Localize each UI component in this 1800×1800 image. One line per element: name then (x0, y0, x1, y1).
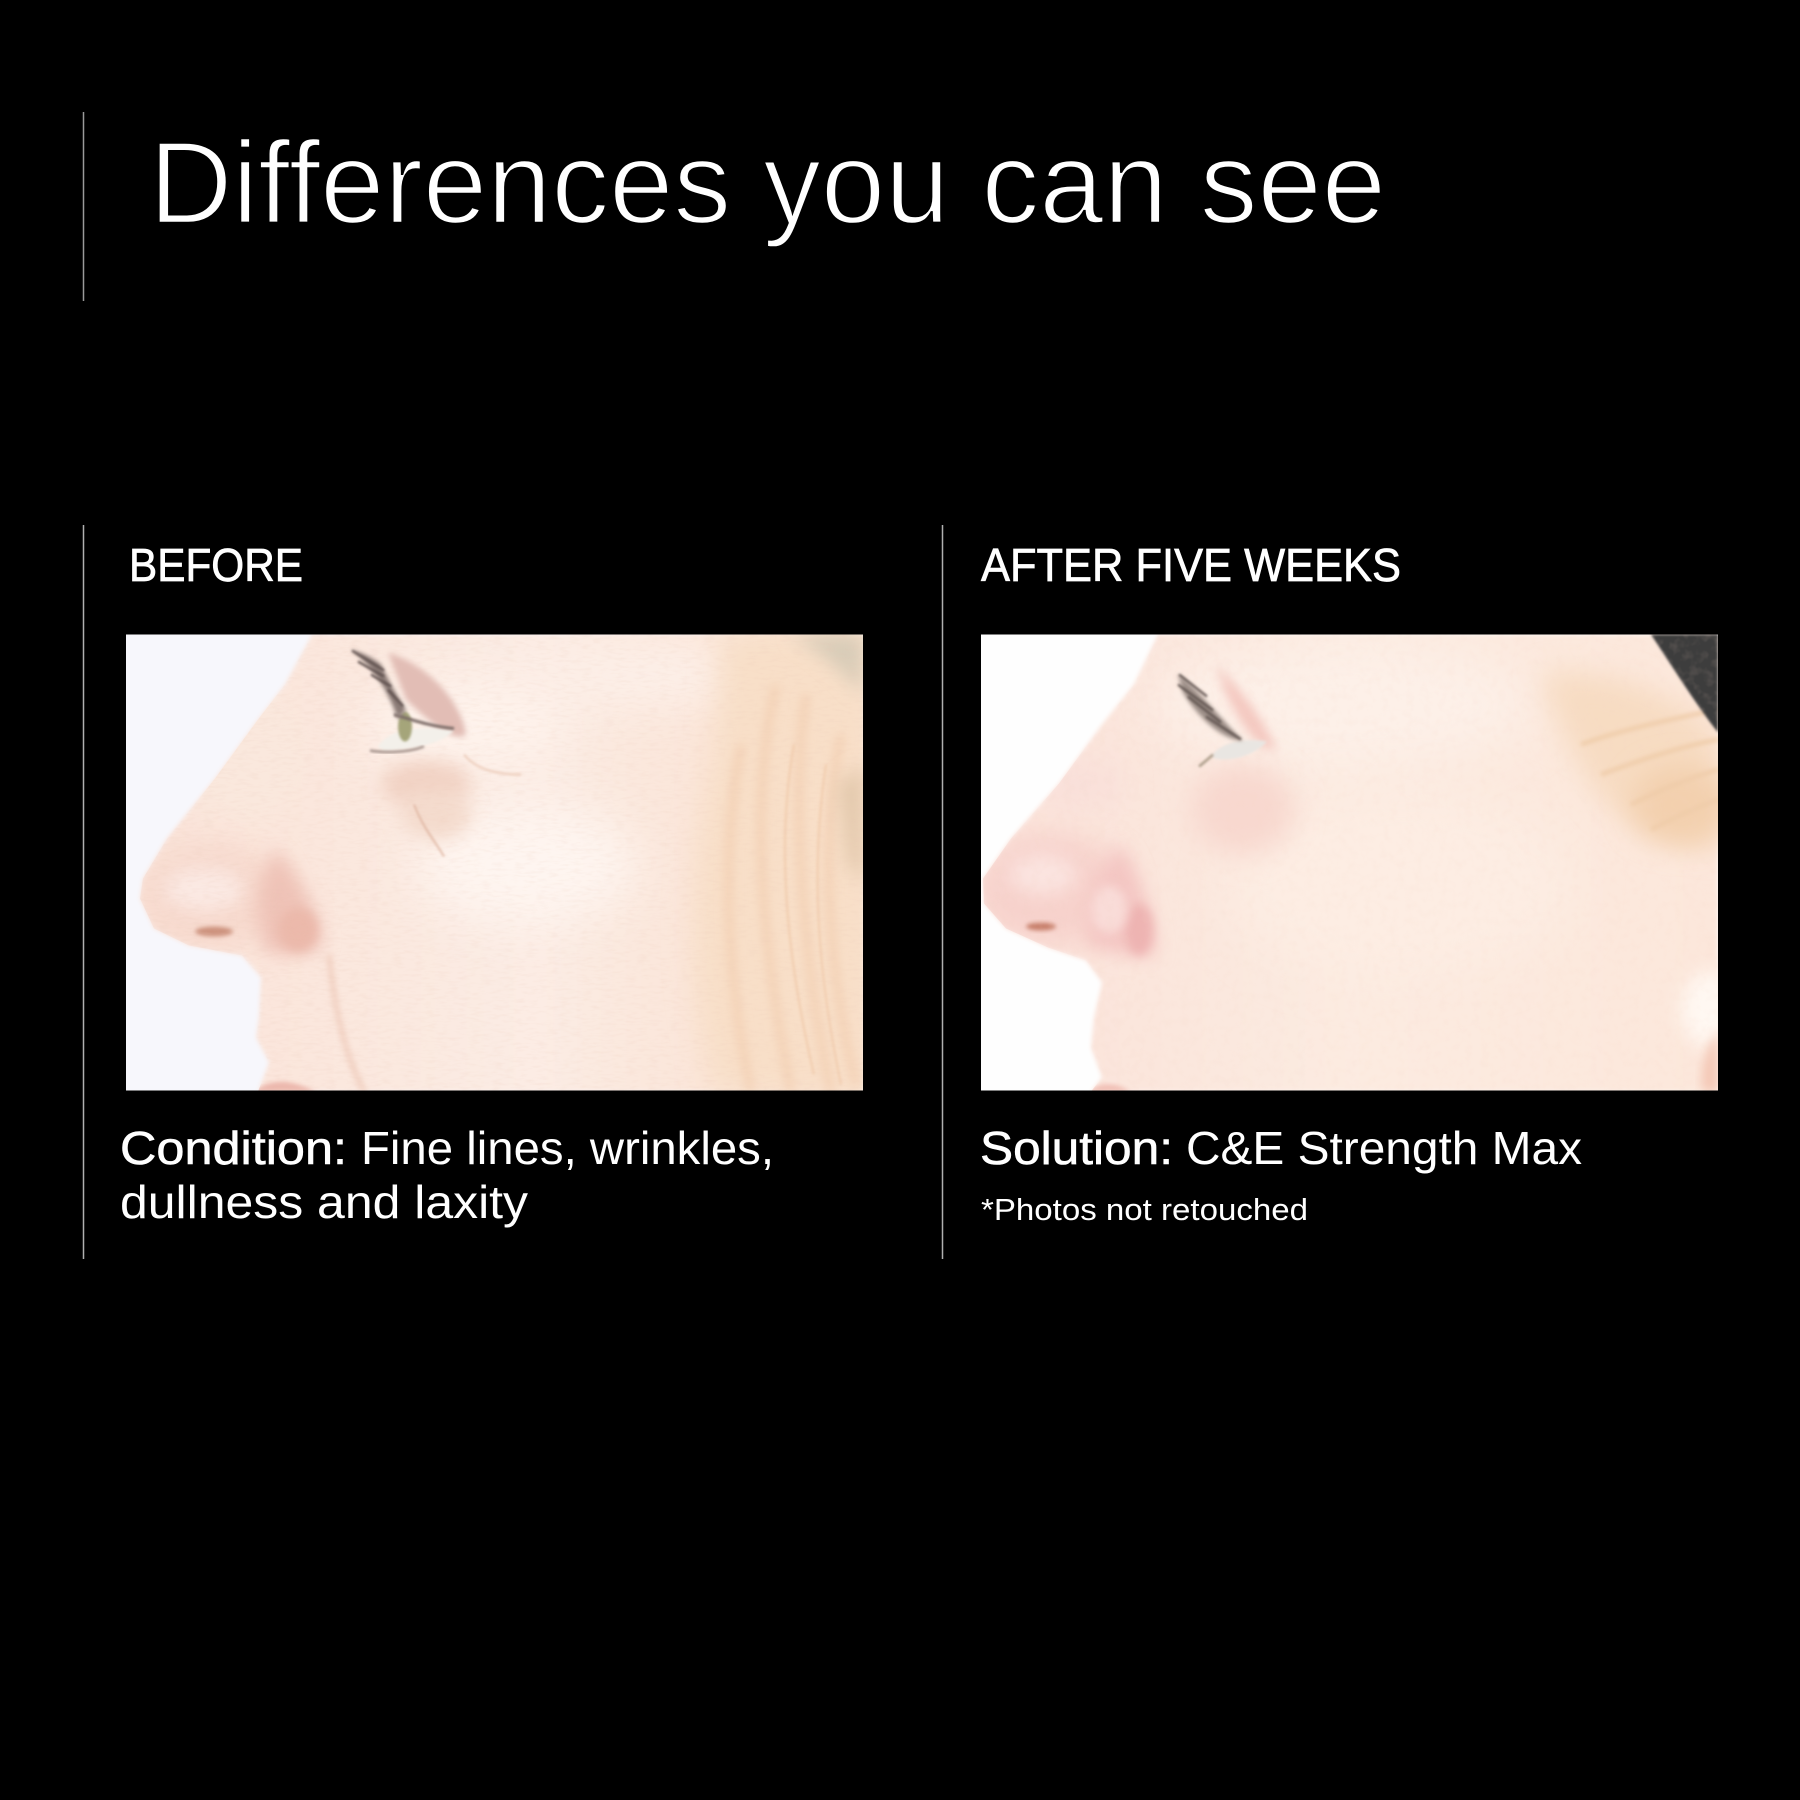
cheek highlight (424, 814, 632, 914)
panel: after five weeks (942, 525, 1737, 1259)
headband (1651, 634, 1718, 732)
nose wing (257, 850, 322, 955)
iris (398, 712, 412, 742)
caption: condition: Condition: (120, 1122, 347, 1174)
eye white (1211, 740, 1267, 760)
title: Differences you can see (149, 117, 1386, 248)
nasolabial fold (329, 954, 364, 1092)
skin texture (1654, 635, 1718, 718)
footnote: *Photos not retouched (981, 1192, 1308, 1227)
lashes (1178, 674, 1243, 740)
nostril (1026, 922, 1056, 930)
skin texture (488, 700, 612, 876)
heading: before: BEFORE (129, 539, 303, 591)
photo: before (126, 634, 863, 1092)
caption: condition (120, 1122, 774, 1228)
under-eye shadow (381, 760, 471, 808)
lashes (351, 650, 406, 720)
lips (254, 1082, 316, 1092)
heading: after five weeks: AFTER FIVE WEEKS (981, 539, 1401, 591)
eye white (381, 729, 454, 749)
caption: solution: C&E Strength Max (1186, 1122, 1582, 1174)
caption: solution: Solution: (980, 1122, 1173, 1174)
photo: after five weeks (976, 634, 1737, 1092)
hair (694, 634, 863, 1092)
nose wing (1086, 844, 1156, 956)
caption: condition: dullness and laxity (120, 1176, 528, 1228)
hair (1541, 673, 1718, 850)
nostril (195, 926, 233, 936)
caption: solution (980, 1122, 1582, 1174)
caption: condition: Fine lines, wrinkles, (361, 1122, 774, 1174)
face skin (983, 634, 1718, 1092)
ear (1678, 970, 1718, 1047)
nose tip (140, 850, 258, 953)
upper lid line (394, 714, 454, 728)
face skin (140, 634, 863, 1092)
eye area redness (1191, 764, 1295, 854)
nose tip (983, 834, 1104, 952)
lips (1087, 1084, 1131, 1092)
panel: before (84, 525, 863, 1259)
eyelid (388, 652, 466, 737)
